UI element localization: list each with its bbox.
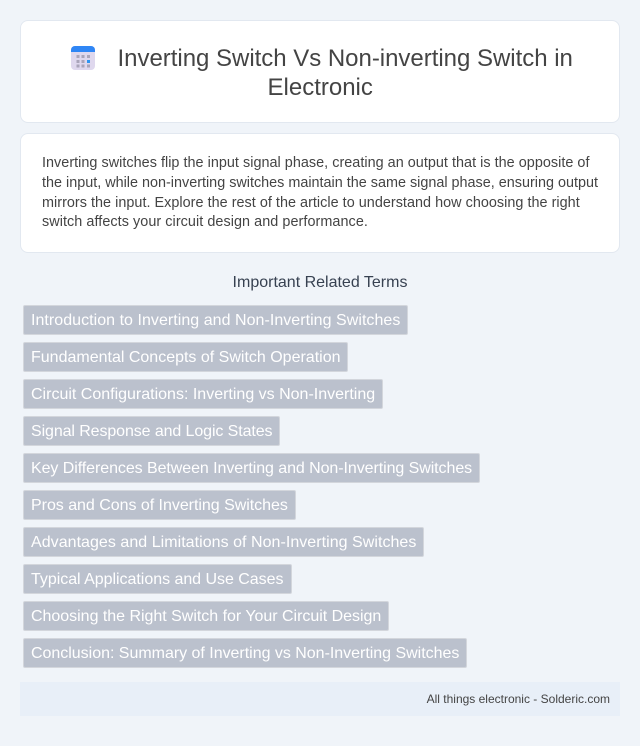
tag 2: Fundamental Concepts of Switch Operation — [31, 349, 340, 366]
intro text: Inverting switches flip the input signal phase, creating an output that is the opposite of — [42, 155, 590, 171]
tag 8: Typical Applications and Use Cases — [31, 571, 283, 588]
tag 7: Advantages and Limitations of Non-Inverting Switches — [31, 534, 416, 551]
list: related term tags — [23, 305, 480, 668]
panel: intro paragraph — [20, 133, 620, 253]
tag 9 — [23, 601, 389, 631]
title: Electronic — [268, 74, 373, 101]
tag 6: Pros and Cons of Inverting Switches — [31, 497, 288, 514]
tag 2 — [23, 342, 348, 372]
tag 7 — [23, 527, 424, 557]
panel: title card — [20, 20, 620, 123]
tag 4 — [23, 416, 280, 446]
intro text — [42, 155, 598, 230]
footer text: All things electronic - Solderic.com — [427, 692, 610, 706]
tag 5 — [23, 453, 480, 483]
tag 10: Conclusion: Summary of Inverting vs Non-Inverting Switches — [31, 645, 459, 662]
heading: related terms: Important Related Terms — [233, 274, 407, 291]
tag 8 — [23, 564, 292, 594]
tag 1 — [23, 305, 408, 335]
footer bar — [20, 682, 620, 716]
title: Inverting Switch Vs Non-inverting Switch in — [118, 45, 573, 72]
title — [118, 45, 573, 101]
tag 4: Signal Response and Logic States — [31, 423, 272, 440]
tag 5: Key Differences Between Inverting and Non-Inverting Switches — [31, 460, 472, 477]
tag 9: Choosing the Right Switch for Your Circuit Design — [31, 608, 381, 625]
tag 3: Circuit Configurations: Inverting vs Non-Inverting — [31, 386, 375, 403]
tag 10 — [23, 638, 467, 668]
tag 6 — [23, 490, 296, 520]
tag 1: Introduction to Inverting and Non-Inverting Switches — [31, 312, 400, 329]
intro text: switch affects your circuit design and performance. — [42, 214, 368, 230]
icon: calendar grid — [71, 46, 95, 70]
intro text: mirrors the input. Explore the rest of the article to understand how choosing the right — [42, 195, 580, 211]
tag 3 — [23, 379, 383, 409]
intro text: the input, while non-inverting switches maintain the same signal phase, ensuring output — [42, 175, 598, 191]
